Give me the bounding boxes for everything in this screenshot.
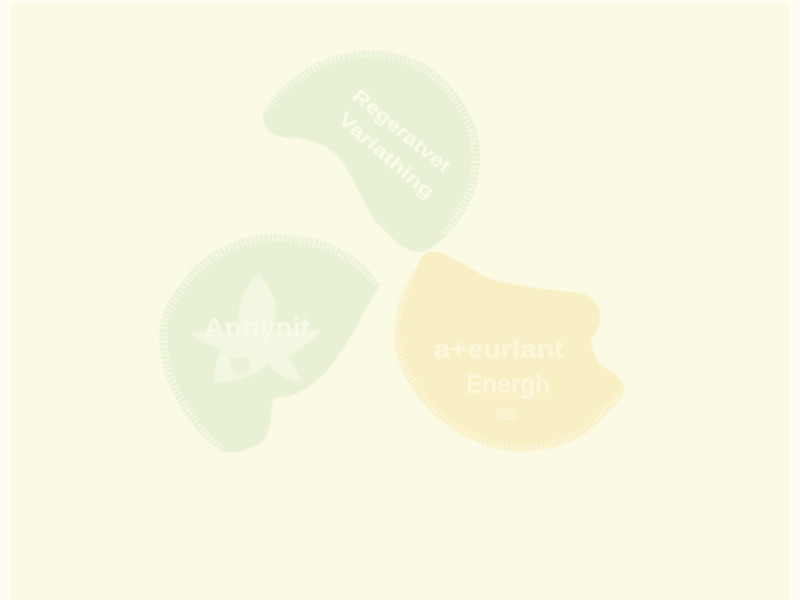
petal rim texture	[396, 272, 622, 448]
panel: annuity	[160, 234, 380, 452]
panel: regenerative variability	[263, 51, 480, 252]
label: regenerative variability: Variathing	[334, 109, 438, 204]
shape: yellow petal	[395, 251, 625, 451]
petal rim texture	[164, 238, 376, 448]
icon: small square	[497, 409, 516, 420]
petal rim texture	[266, 54, 475, 236]
label: annuity: Annynit	[204, 312, 310, 343]
shape: left green petal	[160, 234, 380, 452]
icon: small cup mark	[229, 357, 250, 376]
panel: abundant energy	[395, 251, 625, 451]
label: abundant energy: Energh	[466, 369, 550, 399]
label: abundant energy	[434, 334, 564, 399]
icon: leaf star	[190, 272, 322, 382]
label: abundant energy: a+eurlant	[434, 334, 564, 364]
shape: top green petal	[263, 51, 480, 252]
label: regenerative variability	[334, 86, 455, 204]
label: regenerative variability: Regeratvet	[348, 86, 455, 178]
